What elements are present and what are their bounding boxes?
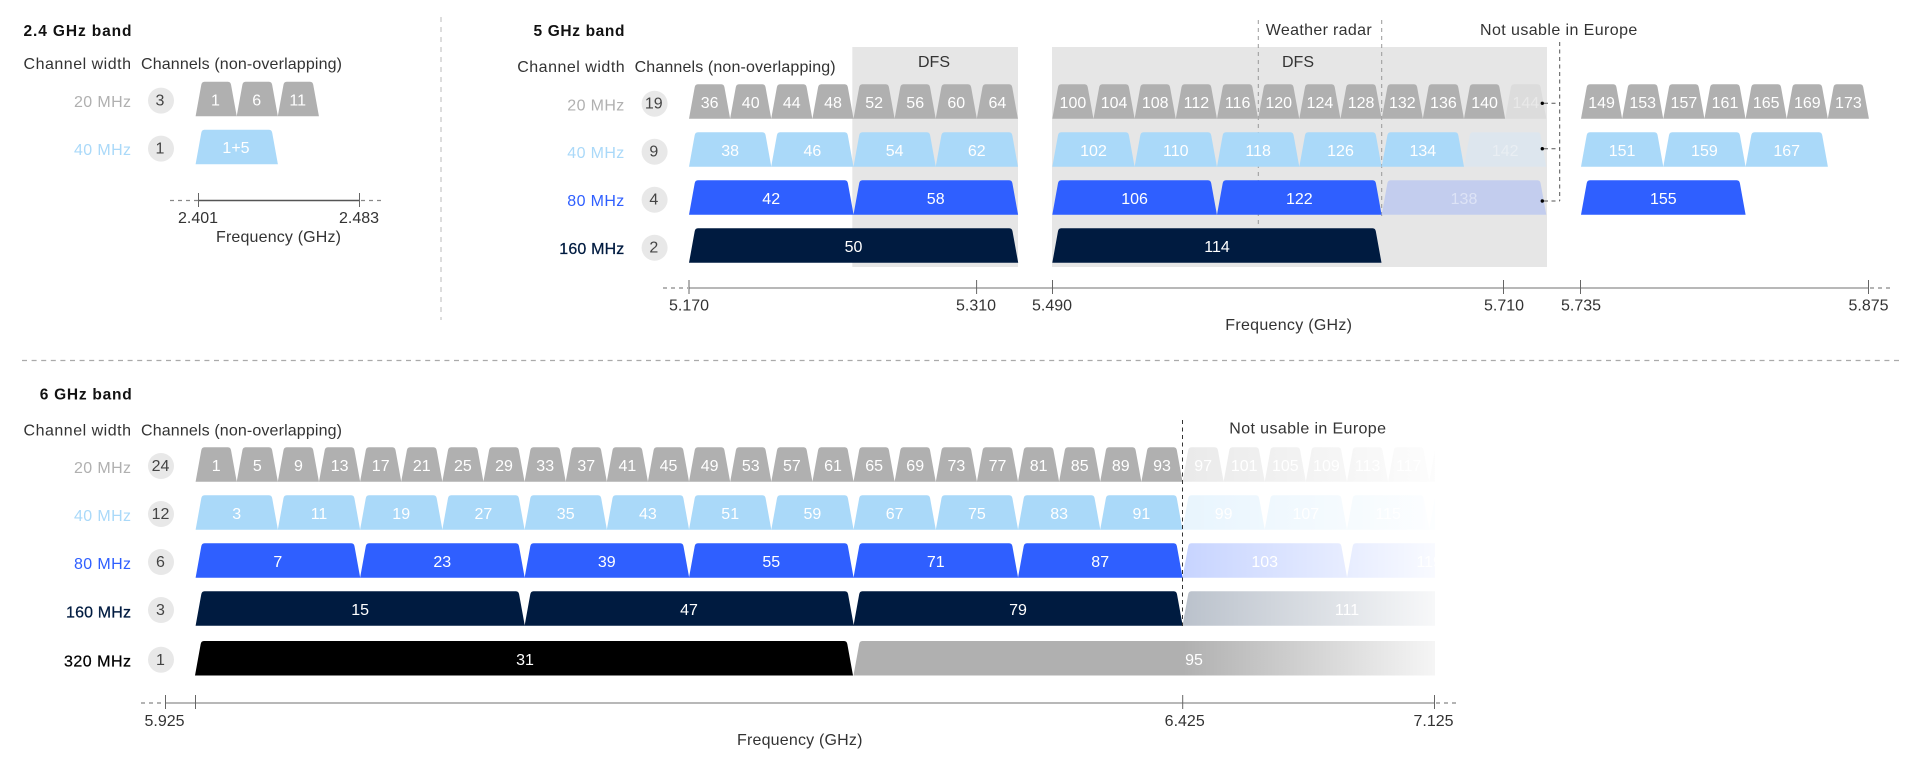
row: 160 MHz: 15 [351,602,369,619]
not usable in Europe bracket [1541,42,1560,203]
frequency axis: 5 GHz: 5.310 [956,298,996,314]
row: 80 MHz: 122 [1286,191,1313,208]
row: 20 MHz: 33 [536,458,554,475]
row: 160 MHz: 2 [649,240,658,257]
faded channels: 20 MHz: 113 [1355,458,1380,475]
row: 160 MHz [559,228,1382,263]
row: 80 MHz [567,180,1746,215]
row: 20 MHz: 56 [906,95,924,112]
frequency axis: 2.4 GHz: 2.483 [339,210,379,227]
row: 20 MHz [74,447,1470,482]
row: 40 MHz: 75 [968,506,986,523]
faded channels: 80 MHz: 119 [1416,554,1442,571]
row: 20 MHz: 144 [1512,95,1539,112]
row: 20 MHz: 37 [577,458,595,475]
row: 20 MHz: 40 [742,95,760,112]
panel: 2.4 GHz band [24,23,381,246]
row: 80 MHz: 6 [156,554,165,571]
panel: 6 GHz band [24,386,1512,749]
row: 40 MHz: 27 [475,506,492,523]
row: 40 MHz [567,132,1828,167]
row: 160 MHz: 3 [156,602,165,619]
row: 160 MHz: 114 [1204,239,1230,256]
row: 80 MHz: 55 [762,554,780,571]
label: not usable in Europe: Not usable in Europe [1480,22,1637,39]
row: 20 MHz: 65 [865,458,883,475]
row: 40 MHz: 91 [1133,506,1150,523]
row: 40 MHz: 54 [886,143,904,160]
row: 20 MHz: 48 [824,95,842,112]
row: 20 MHz [567,84,1869,119]
row: 40 MHz [74,130,278,164]
row: 20 MHz: 36 [701,95,719,112]
faded channels: 80 MHz [1182,543,1426,578]
row: 20 MHz: 64 [989,95,1006,112]
column header: channel width: Channel width [24,423,131,440]
row: 20 MHz: 81 [1030,458,1048,475]
frequency axis: 5 GHz: Frequency (GHz) [1225,317,1352,334]
faded channels: 40 MHz: 115 [1375,506,1401,523]
row: 20 MHz [74,82,319,116]
row: 160 MHz: 47 [680,602,698,619]
weather radar boundaries [1258,20,1382,228]
row: 80 MHz: 58 [927,191,945,208]
row: 40 MHz: 62 [968,143,986,160]
row: 80 MHz: 7 [273,554,282,571]
frequency axis: 6 GHz [141,695,1458,749]
row: 80 MHz: 80 MHz [567,193,624,210]
row: 40 MHz: 46 [804,143,821,160]
frequency axis: 6 GHz: Frequency (GHz) [737,732,862,749]
faded channels: 160 MHz [1183,591,1434,626]
frequency axis: 2.4 GHz: 2.401 [178,210,218,227]
row: 20 MHz: 52 [865,95,883,112]
row: 20 MHz: 149 [1588,95,1615,112]
row: 40 MHz: 110 [1163,143,1189,160]
faded channels: 20 MHz [1183,447,1358,482]
row: 20 MHz: 100 [1060,95,1086,112]
row: 40 MHz: 12 [152,506,170,523]
label: DFS lower: DFS [918,54,950,71]
row: 20 MHz: 120 [1265,95,1292,112]
label: not usable in Europe: Not usable in Europe [1229,420,1386,437]
column header: channels: Channels (non-overlapping) [141,56,342,73]
row: 40 MHz: 40 MHz [74,508,131,525]
faded channels: 20 MHz: 101 [1231,458,1258,475]
panel: 5 GHz band [517,20,1893,334]
heading: 6 GHz band: 6 GHz band [40,386,132,403]
faded channels: 80 MHz: 103 [1251,554,1278,571]
row: 20 MHz: 20 MHz [74,94,131,111]
row: 20 MHz: 24 [152,458,170,475]
row: 20 MHz: 19 [645,96,663,113]
row: 40 MHz: 19 [392,506,410,523]
channel 95 (fades out): 95 [1185,652,1203,669]
row: 20 MHz: 60 [947,95,965,112]
row: 80 MHz: 71 [927,554,945,571]
row: 40 MHz: 51 [721,506,739,523]
row: 20 MHz: 17 [372,458,390,475]
row: 20 MHz: 85 [1071,458,1089,475]
row: 40 MHz: 1+5 [222,140,250,157]
frequency axis: 5 GHz: 5.710 [1484,298,1524,314]
row: 20 MHz: 157 [1671,95,1697,112]
row: 80 MHz: 87 [1091,554,1109,571]
row: 20 MHz: 77 [989,458,1006,475]
row: 40 MHz: 59 [804,506,821,523]
faded channels: 40 MHz [1182,495,1366,530]
row: 20 MHz: 132 [1389,95,1416,112]
row: 20 MHz: 173 [1835,95,1862,112]
row: 20 MHz: 104 [1101,95,1128,112]
heading: 2.4 GHz band: 2.4 GHz band [24,23,132,40]
row: 160 MHz: 50 [845,239,862,256]
row: 20 MHz: 61 [824,458,842,475]
row: 20 MHz: 21 [413,458,431,475]
row: 40 MHz: 38 [721,143,739,160]
row: 320 MHz: 31 [516,652,534,669]
not usable boundary: 6 GHz [1182,420,1184,626]
DFS region: upper block [1052,47,1547,267]
frequency axis: 5 GHz: 5.170 [669,298,709,314]
row: 40 MHz: 102 [1080,143,1107,160]
row: 320 MHz: 320 MHz [64,654,131,671]
row: 20 MHz: 69 [906,458,924,475]
row: 80 MHz: 42 [762,191,780,208]
frequency axis: 6 GHz: 6.425 [1165,713,1205,730]
faded channels: 20 MHz: 109 [1313,458,1340,475]
frequency axis: 5 GHz: 5.875 [1848,298,1889,314]
row: 20 MHz: 53 [742,458,760,475]
row: 20 MHz: 57 [783,458,801,475]
row: 160 MHz: 79 [1009,602,1027,619]
row: 80 MHz: 80 MHz [74,556,131,573]
row: 40 MHz: 67 [886,506,904,523]
row: 40 MHz: 35 [557,506,575,523]
row: 20 MHz: 124 [1307,95,1333,112]
row: 20 MHz: 29 [495,458,513,475]
row: 320 MHz [64,641,1435,676]
row: 20 MHz: 5 [253,458,262,475]
row: 40 MHz: 9 [649,144,658,161]
row: 20 MHz: 169 [1794,95,1821,112]
row: 40 MHz: 43 [639,506,657,523]
row: 80 MHz: 23 [433,554,451,571]
row: 20 MHz: 116 [1225,95,1250,112]
row: 20 MHz: 140 [1471,95,1498,112]
row: 20 MHz: 13 [331,458,349,475]
frequency axis: 6 GHz: 7.125 [1413,713,1454,730]
row: 40 MHz: 40 MHz [567,145,624,162]
column header: channel width: Channel width [24,56,131,73]
row: 20 MHz: 25 [454,458,472,475]
row: 80 MHz: 106 [1121,191,1148,208]
channel 95 (fades out) [854,641,1435,676]
row: 20 MHz: 20 MHz [74,460,131,477]
row: 40 MHz: 167 [1773,143,1800,160]
row: 20 MHz: 20 MHz [567,97,624,114]
row: 80 MHz: 138 [1451,191,1477,208]
row: 20 MHz: 9 [294,458,303,475]
row: 20 MHz: 89 [1112,458,1130,475]
row: 20 MHz: 3 [156,93,165,110]
row: 40 MHz: 118 [1245,143,1271,160]
frequency axis: 5 GHz [663,280,1893,334]
row: 40 MHz: 11 [311,506,327,523]
frequency axis: 6 GHz: 5.925 [144,713,185,730]
row: 40 MHz: 134 [1409,143,1436,160]
row: 320 MHz: 1 [156,652,165,669]
column header: channel width: Channel width [517,59,625,76]
row: 40 MHz: 159 [1691,143,1718,160]
row: 20 MHz: 45 [660,458,678,475]
frequency axis: 2.4 GHz: Frequency (GHz) [216,229,341,246]
row: 40 MHz: 3 [232,506,241,523]
row: 20 MHz: 41 [619,458,636,475]
row: 20 MHz: 11 [289,92,306,110]
row: 20 MHz: 153 [1629,95,1656,112]
row: 20 MHz: 108 [1142,95,1169,112]
column header: channels: Channels (non-overlapping) [635,59,836,76]
faded channels: 40 MHz: 107 [1292,506,1319,523]
row: 20 MHz: 1 [211,92,220,110]
row: 20 MHz: 44 [783,95,801,112]
frequency axis: 2.4 GHz [170,193,381,246]
frequency axis: 5 GHz: 5.490 [1032,298,1072,314]
faded channels: 20 MHz: 97 [1194,458,1212,475]
faded channels: 160 MHz: 111 [1335,602,1359,619]
row: 40 MHz: 83 [1050,506,1068,523]
faded channels: 40 MHz: 99 [1215,506,1233,523]
row: 80 MHz [74,543,1512,578]
column header: channels: Channels (non-overlapping) [141,423,342,440]
row: 20 MHz: 73 [948,458,965,475]
row: 20 MHz: 136 [1430,95,1457,112]
row: 20 MHz: 1 [212,458,221,475]
row: 40 MHz: 151 [1609,143,1636,160]
faded channels: 20 MHz: 117 [1396,458,1422,475]
row: 80 MHz: 155 [1650,191,1677,208]
row: 160 MHz [66,591,1512,626]
row: 40 MHz [74,495,1366,530]
row: 160 MHz: 160 MHz [559,241,624,258]
row: 20 MHz: 6 [252,92,261,110]
row: 20 MHz: 165 [1753,95,1780,112]
row: 40 MHz: 40 MHz [74,142,131,159]
row: 160 MHz: 160 MHz [66,604,131,621]
row: 80 MHz: 4 [649,192,658,209]
row: 20 MHz: 128 [1348,95,1375,112]
heading: 5 GHz band: 5 GHz band [534,23,624,40]
row: 20 MHz: 93 [1153,458,1171,475]
row: 40 MHz: 126 [1327,143,1354,160]
row: 20 MHz: 112 [1184,95,1209,112]
row: 20 MHz: 49 [701,458,719,475]
row: 20 MHz: 161 [1712,95,1738,112]
row: 80 MHz: 39 [598,554,616,571]
label: DFS upper: DFS [1282,54,1314,71]
faded channels: 20 MHz: 105 [1272,458,1299,475]
label: weather radar: Weather radar [1266,22,1372,39]
frequency axis: 5 GHz: 5.735 [1561,298,1601,314]
row: 40 MHz: 142 [1492,143,1519,160]
DFS region: lower block [852,47,1018,267]
row: 40 MHz: 1 [156,141,165,158]
